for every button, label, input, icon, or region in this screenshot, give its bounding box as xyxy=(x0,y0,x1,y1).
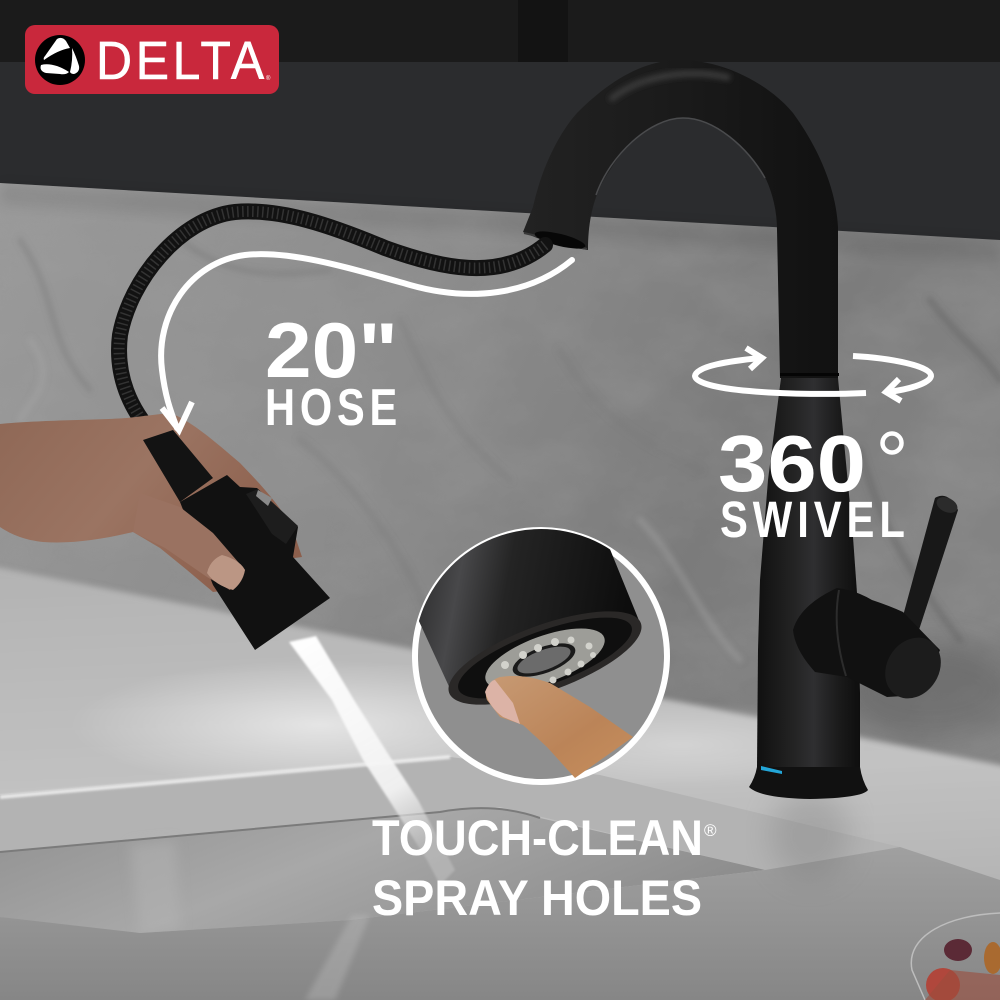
logo: Delta xyxy=(25,25,279,94)
handle lever xyxy=(900,496,958,638)
spray head xyxy=(143,430,330,650)
thumb and nail xyxy=(133,493,245,590)
background: marble backsplash xyxy=(0,180,1000,800)
background: countertop xyxy=(0,560,1000,1000)
base xyxy=(749,767,868,799)
callout: touch-clean spray holes: ® xyxy=(704,821,717,840)
icon: Delta triangle xyxy=(35,35,85,85)
arrows: rotation xyxy=(695,348,931,401)
sink basin xyxy=(0,808,765,933)
callout: touch-clean spray holes: SPRAY HOLES xyxy=(372,870,702,926)
counter front edge xyxy=(0,757,900,870)
water stream xyxy=(289,636,455,885)
indicator light xyxy=(761,766,782,774)
callout: 360 swivel: SWIVEL xyxy=(720,491,910,548)
callout: touch-clean spray holes: TOUCH-CLEAN xyxy=(372,810,703,866)
arrow: hose length xyxy=(161,254,572,428)
finger xyxy=(486,676,633,778)
gooseneck and spout xyxy=(523,60,838,378)
body xyxy=(757,378,860,767)
spray head close-up xyxy=(419,529,639,686)
hand xyxy=(0,413,302,592)
lower counter surface xyxy=(0,847,1000,1000)
faucet xyxy=(523,60,960,799)
panel: spray head detail circle xyxy=(412,527,670,785)
background: cabinet and dark panel xyxy=(0,0,1000,260)
handle hub xyxy=(793,588,940,697)
callout: 20 inch hose: 20" xyxy=(265,306,398,394)
callout: 20 inch hose xyxy=(161,254,572,436)
logo: Delta: DELTA xyxy=(96,31,268,91)
callout: touch-clean spray holes xyxy=(372,810,717,926)
pull-down hose xyxy=(119,211,545,436)
callout: 360 swivel: 360 xyxy=(718,419,866,508)
logo: Delta: ® xyxy=(266,75,271,82)
callout: 20 inch hose: HOSE xyxy=(265,378,402,436)
fruit glass xyxy=(911,913,1000,1000)
callout: 360 swivel xyxy=(695,348,931,548)
